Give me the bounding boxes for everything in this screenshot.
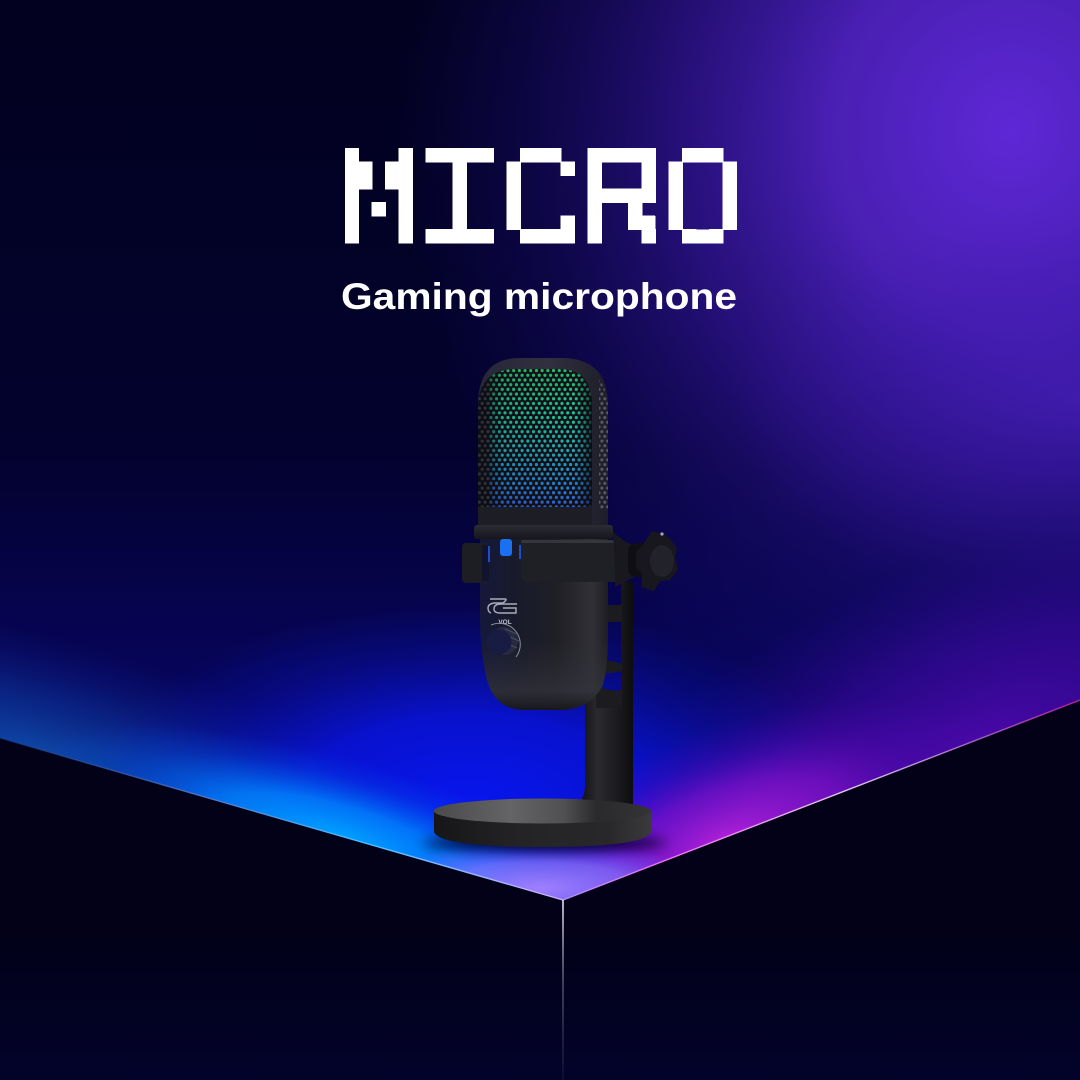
mesh grille [478, 366, 592, 507]
microphone [423, 358, 678, 851]
title: MICRO in pixel lettering: O [663, 123, 746, 290]
mic body [480, 535, 608, 710]
floor light: lilac near the corner [370, 840, 710, 936]
subtitle: Gaming microphone [341, 276, 737, 317]
floor light: cyan along the left edge [20, 676, 660, 1000]
desk stand arm [578, 582, 633, 805]
right mesh strip [599, 375, 608, 510]
volume scale arc [491, 623, 520, 657]
mic head shell [478, 358, 608, 525]
dark box front faces [0, 700, 1080, 1080]
lower head band [478, 507, 592, 525]
floor light: deep blue wash [80, 600, 860, 1020]
desk base [434, 798, 651, 847]
base shadow [423, 835, 667, 851]
floor light: dim blue at left [0, 513, 515, 997]
collar ring [474, 525, 613, 539]
floor light: magenta along the right edge [434, 641, 1016, 1039]
vertical box corner line [562, 900, 564, 1080]
background: purple glow right side [730, 210, 1080, 590]
brand logo [488, 599, 517, 613]
volume knob [486, 627, 519, 655]
floor light: violet at right [520, 417, 1080, 1073]
title: MICRO in pixel lettering [336, 123, 746, 291]
volume label: VOL [498, 619, 512, 626]
left clip [462, 543, 490, 583]
right lit edge [563, 700, 1080, 900]
left lit edge [0, 738, 563, 900]
right band [519, 540, 623, 582]
title: MICRO in pixel lettering: C [499, 124, 584, 291]
title: MICRO in pixel lettering: M [336, 123, 422, 277]
title: MICRO in pixel lettering: I [412, 123, 509, 291]
title: MICRO in pixel lettering: R [578, 123, 668, 290]
tightening knob [613, 531, 678, 591]
blue status light [500, 539, 512, 556]
